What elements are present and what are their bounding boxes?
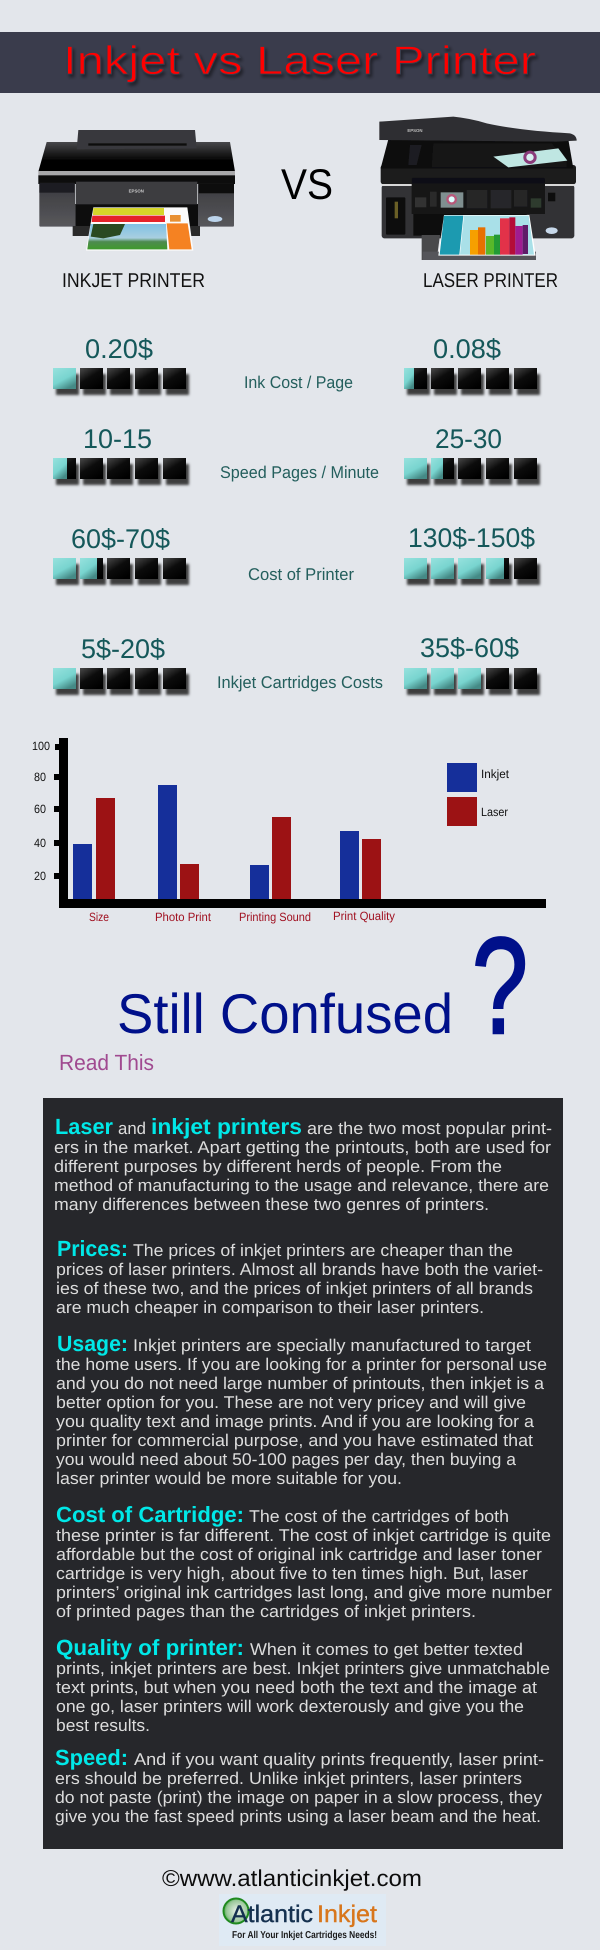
text block: introduction: different purposes by different herds of people. From the	[54, 1157, 502, 1176]
text block: speed: do not paste (print) the image on paper in a slow process, they	[55, 1788, 543, 1807]
text block: cost of cartridge	[56, 1502, 552, 1621]
text block: speed: give you the fast speed prints using a laser beam and the heat.	[55, 1807, 541, 1826]
title banner	[0, 32, 600, 93]
text block: usage: you quality text and image prints. And if you are looking for a	[56, 1412, 535, 1431]
x axis labels: Photo Print	[155, 910, 212, 924]
rating: laser cartridge cost	[404, 668, 540, 695]
text block: usage: you would need about 50-100 pages per day, then buying a	[56, 1450, 517, 1469]
panel: inkjet cartridges costs	[53, 633, 540, 695]
text block: quality of printer	[56, 1635, 550, 1735]
label: inkjet printer: INKJET PRINTER	[62, 270, 205, 292]
rating: laser ink cost	[404, 368, 540, 395]
label: laser printer: LASER PRINTER	[423, 270, 558, 292]
text block: usage: the home users. If you are looking for a printer for personal use	[56, 1355, 547, 1374]
logo: atlantic inkjet: Inkjet	[317, 1901, 377, 1928]
text block: prices	[56, 1236, 543, 1317]
heading: VS: VS	[281, 161, 333, 209]
x axis labels	[89, 909, 395, 924]
bars: printing sound	[250, 817, 291, 899]
text block: speed: ers should be preferred. Unlike inkjet printers, laser printers	[55, 1769, 522, 1788]
text block: prices: The prices of inkjet printers are cheaper than the	[133, 1241, 513, 1260]
text block: introduction: many differences between these two genres of printers.	[54, 1195, 489, 1214]
label: cost of printer: Cost of Printer	[248, 565, 354, 584]
subheading: read this: Read This	[59, 1050, 154, 1075]
text block: introduction: Laser	[55, 1114, 113, 1139]
value: laser speed: 25-30	[435, 424, 502, 454]
legend: Laser	[481, 805, 508, 819]
label: ink cost / page: Ink Cost / Page	[244, 373, 353, 392]
footer url: ©www.atlanticinkjet.com	[162, 1865, 422, 1891]
text block: usage	[56, 1331, 547, 1488]
rating: inkjet cartridge cost	[53, 668, 189, 695]
y axis labels: 80	[34, 770, 46, 784]
bars: size	[73, 798, 115, 899]
label: inkjet cartridges costs: Inkjet Cartridges Costs	[217, 673, 383, 692]
icon: inkjet printer: EPSON	[129, 188, 144, 193]
text block: quality of printer: When it comes to get better texted	[250, 1640, 523, 1659]
text block: usage: Usage:	[57, 1331, 128, 1356]
text block: quality of printer: Quality of printer:	[56, 1635, 244, 1660]
text block: speed	[55, 1745, 544, 1826]
text block: prices: are much cheaper in comparison to their laser printers.	[56, 1298, 484, 1317]
rating: inkjet speed	[53, 458, 189, 485]
heading: still confused: Still Confused	[117, 982, 453, 1045]
rating: laser printer cost	[404, 558, 540, 585]
logo: atlantic inkjet	[219, 1894, 386, 1946]
text block: speed: And if you want quality prints frequently, laser print-	[134, 1750, 544, 1769]
x axis labels: Size	[89, 910, 109, 924]
text block: quality of printer: one go, laser printers will work dexterously and give you the	[56, 1697, 524, 1716]
y axis labels: 100	[32, 739, 50, 753]
icon: laser printer: EPSON	[407, 128, 423, 133]
text block: usage: and you do not need large number of printouts, then inkjet is a	[56, 1374, 545, 1393]
rating: laser speed	[404, 458, 540, 485]
text block: usage: better option for you. These are not very pricey and will give	[56, 1393, 526, 1412]
logo: atlantic inkjet: Atlantic	[231, 1901, 313, 1928]
icon: question mark: ?	[472, 910, 528, 1063]
value: inkjet ink cost: 0.20$	[85, 334, 153, 364]
title: Inkjet vs Laser Printer	[63, 39, 536, 83]
value: inkjet cartridge cost: 5$-20$	[81, 634, 165, 664]
rating: inkjet ink cost	[53, 368, 189, 395]
text block: usage: laser printer would be more suitable for you.	[56, 1469, 402, 1488]
bars: print quality	[340, 831, 381, 899]
bar chart	[32, 738, 546, 924]
text block: quality of printer: text prints, but when you need both the text and the image at	[56, 1678, 537, 1697]
text block: cost of cartridge: affordable but the cost of original ink cartridge and laser toner	[56, 1545, 542, 1564]
label: speed pages / minute: Speed Pages / Minute	[220, 463, 379, 482]
text block: introduction	[54, 1114, 552, 1214]
y axis labels	[32, 739, 50, 883]
text block: usage: printer for commercial purpose, and you have estimated that	[56, 1431, 533, 1450]
value: inkjet printer cost: 60$-70$	[71, 524, 170, 554]
text block: quality of printer: best results.	[56, 1716, 150, 1735]
panel: cost of printer	[53, 523, 540, 585]
legend: Inkjet	[481, 767, 510, 781]
value: laser ink cost: 0.08$	[433, 334, 501, 364]
x axis labels: Printing Sound	[239, 910, 311, 924]
text block: introduction: are the two most popular print-	[307, 1119, 552, 1138]
y axis labels: 40	[34, 836, 46, 850]
text block: usage: Inkjet printers are specially manufactured to target	[133, 1336, 531, 1355]
text block: introduction: inkjet printers	[151, 1114, 302, 1139]
text block: cost of cartridge: these printer is far different. The cost of inkjet cartridge is quite	[56, 1526, 551, 1545]
text block: introduction: ers in the market. Apart getting the printouts, both are used for	[54, 1138, 551, 1157]
text block: prices: Prices:	[57, 1236, 128, 1261]
icon: inkjet printer	[38, 130, 235, 251]
bars: photo print	[158, 785, 199, 899]
logo: atlantic inkjet: For All Your Inkjet Cartridges Needs!	[232, 1930, 377, 1941]
text block: cost of cartridge: Cost of Cartridge:	[56, 1502, 244, 1527]
rating: inkjet printer cost	[53, 558, 189, 585]
text block: quality of printer: prints, inkjet printers are best. Inkjet printers give unmatchable	[56, 1659, 550, 1678]
text block: prices: ies of these two, and the prices of inkjet printers of all brands	[56, 1279, 533, 1298]
text block: cost of cartridge: printers’ original ink cartridges last long, and give more number	[56, 1583, 552, 1602]
text block: prices: prices of laser printers. Almost all brands have both the variet-	[56, 1260, 543, 1279]
text block: cost of cartridge: cartridge is very high, about five to ten times high. But, laser	[56, 1564, 528, 1583]
icon: laser printer	[379, 117, 577, 260]
y axis labels: 20	[34, 869, 46, 883]
y axis labels: 60	[34, 802, 46, 816]
text block: introduction: and	[118, 1119, 146, 1138]
value: inkjet speed: 10-15	[83, 424, 152, 454]
value: laser cartridge cost: 35$-60$	[420, 633, 519, 663]
text block: speed: Speed:	[55, 1745, 128, 1770]
text block: cost of cartridge: of printed pages than the cartridges of inkjet printers.	[56, 1602, 476, 1621]
panel: article text	[43, 1098, 563, 1849]
value: laser printer cost: 130$-150$	[408, 523, 535, 553]
panel: speed pages per minute	[53, 424, 540, 485]
text block: introduction: method of manufacturing to the usage and relevance, there are	[54, 1176, 549, 1195]
text block: cost of cartridge: The cost of the cartridges of both	[249, 1507, 509, 1526]
legend	[447, 763, 510, 826]
panel: ink cost per page	[53, 334, 540, 395]
x axis labels: Print Quality	[333, 909, 395, 923]
